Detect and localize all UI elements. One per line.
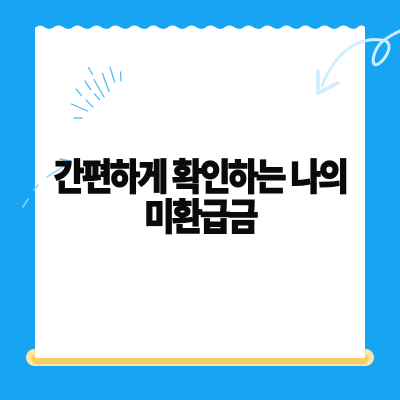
title line 2: 미환급금 (144, 197, 256, 238)
arrow: curled arrow top right (318, 31, 400, 93)
yellow shadow bar (26, 349, 374, 366)
icon: sparkle lines (72, 67, 121, 118)
arrow: small dashed arrow left (23, 159, 70, 207)
title line 1: 간편하게 확인하는 나의 (54, 157, 346, 198)
paper card with scalloped top edge (35, 26, 365, 358)
